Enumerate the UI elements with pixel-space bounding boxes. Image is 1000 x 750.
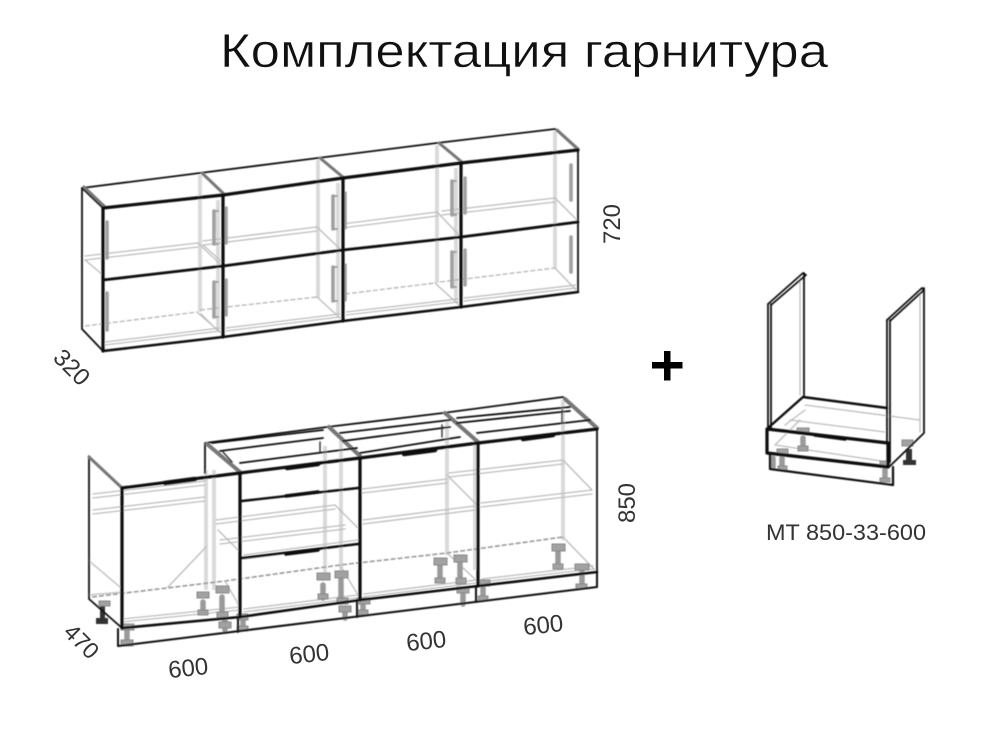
- inner lines and feet: [773, 276, 920, 482]
- dimension: 600 second: 600: [288, 639, 331, 670]
- oven cabinet plinth: [770, 454, 893, 485]
- inner shelves and posts: [88, 400, 595, 622]
- dimension: 320: 320: [48, 344, 95, 391]
- dimension: 720: 720: [599, 204, 626, 244]
- cabinet frame: [89, 397, 597, 628]
- dimension: 850: 850: [614, 483, 641, 523]
- dimension: 600 first: 600: [167, 653, 210, 684]
- upper wall cabinets drawing: [82, 129, 578, 351]
- dimension: 600 third: 600: [405, 626, 448, 657]
- door handles: [107, 165, 571, 330]
- dimension: 600 fourth: 600: [522, 610, 565, 641]
- bottom and drawer: [767, 397, 888, 467]
- title: Комплектация гарнитура: [220, 24, 829, 77]
- cabinet frame: [82, 129, 578, 351]
- plus sign: [652, 351, 682, 380]
- dimension: 470: 470: [59, 619, 104, 664]
- side panels: [768, 273, 924, 467]
- lower base cabinets drawing: [88, 397, 597, 646]
- oven cabinet drawing: [767, 273, 924, 485]
- adjustable feet: [96, 544, 589, 646]
- plinth: [118, 572, 597, 646]
- model label: MT 850-33-600: [766, 520, 926, 545]
- inner shelves and back posts: [85, 131, 578, 345]
